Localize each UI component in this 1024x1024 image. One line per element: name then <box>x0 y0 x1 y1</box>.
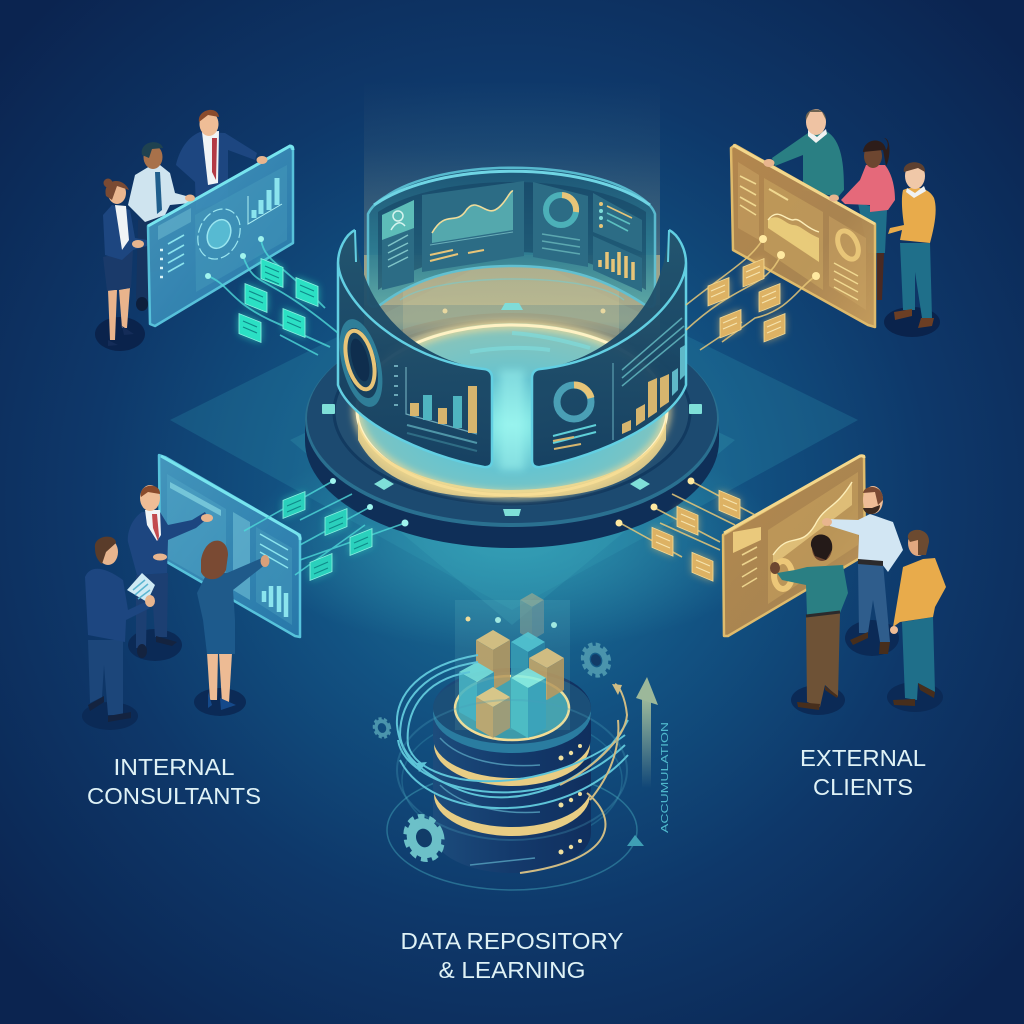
back markers <box>442 303 606 314</box>
top-left team panel <box>95 110 293 351</box>
large gear <box>402 814 446 862</box>
ticket glow <box>652 490 740 581</box>
label: external clients line 2: CLIENTS <box>813 774 913 800</box>
donut card <box>533 182 588 267</box>
label: data repository: DATA REPOSITORY <box>400 928 624 954</box>
small teal arrowhead <box>627 835 644 846</box>
accumulation label: ACCUMULATION <box>659 722 671 833</box>
glass column behind back screen <box>364 255 660 365</box>
tick marks <box>394 366 398 405</box>
person: woman in pink <box>841 138 895 300</box>
tickets <box>283 492 372 580</box>
label: internal consultants: INTERNAL <box>114 754 235 780</box>
person: man holding tablet <box>82 537 155 730</box>
tickets <box>239 259 318 342</box>
inner column light <box>403 265 619 345</box>
line chart card <box>422 181 524 272</box>
person: man with beard <box>822 486 903 656</box>
person: man in teal sweater <box>770 534 848 715</box>
rising data dots <box>466 616 557 628</box>
gauge ring <box>332 315 390 411</box>
swirl arrows <box>397 655 628 873</box>
glowing core <box>357 323 667 493</box>
glass dashboard panel <box>159 455 300 637</box>
label: external clients: EXTERNAL <box>800 745 926 771</box>
upper right gear <box>579 642 613 678</box>
person: man pointing, red tie <box>128 485 213 661</box>
person: woman pointing <box>194 541 270 716</box>
amber dashboard panel <box>731 145 875 327</box>
person: man in teal sweater <box>772 109 844 197</box>
top-right data flow tickets <box>686 235 820 350</box>
status lights <box>558 744 582 854</box>
profile card <box>382 200 414 290</box>
curved front screen: right wing <box>532 230 686 467</box>
hands on panel <box>764 159 839 202</box>
donut chart <box>553 385 596 449</box>
light beam above hub <box>364 80 660 305</box>
rising bar chart <box>613 318 685 440</box>
gears <box>372 642 613 862</box>
glass dashboard panel <box>148 146 293 326</box>
bottom-left data flow tickets <box>244 478 408 580</box>
person: man with blue tie <box>128 142 190 311</box>
cubes <box>459 630 564 738</box>
isometric floor diamond <box>170 250 858 650</box>
bottom swirl rings <box>387 715 637 890</box>
bar chart <box>406 367 477 451</box>
ticket glow <box>283 492 372 580</box>
top-left data flow tickets <box>205 236 338 355</box>
label: internal consultants line 2: CONSULTANTS <box>87 783 261 809</box>
person: man in yellow sweater <box>884 162 940 337</box>
person: woman shadow <box>95 317 145 351</box>
light columns <box>455 600 570 730</box>
cube: ghost top <box>520 593 544 640</box>
top-right team panel <box>731 109 940 337</box>
label: learning: & LEARNING <box>438 957 586 983</box>
bottom-left team panel <box>82 455 300 730</box>
person: man in yellow sweater <box>887 530 946 712</box>
tickets <box>652 490 740 581</box>
hands on panel <box>132 156 268 248</box>
tickets <box>708 259 785 342</box>
small left gear <box>372 717 392 739</box>
curved front screen: left wing <box>332 230 492 467</box>
central hub platform <box>305 255 719 548</box>
person: man with red tie <box>176 110 257 210</box>
ticket glow <box>708 259 785 342</box>
accumulation arrow <box>627 677 671 846</box>
data repository cylinder <box>387 593 637 890</box>
bottom-right data flow tickets <box>616 478 755 581</box>
curved back screen <box>368 168 655 307</box>
small bar card <box>593 236 642 292</box>
platform markers <box>322 404 702 516</box>
bottom-right team panel <box>723 456 946 715</box>
person: woman in navy <box>103 178 147 346</box>
ticket glow <box>239 259 318 342</box>
amber dashboard panel <box>723 456 865 636</box>
list card <box>593 193 642 252</box>
